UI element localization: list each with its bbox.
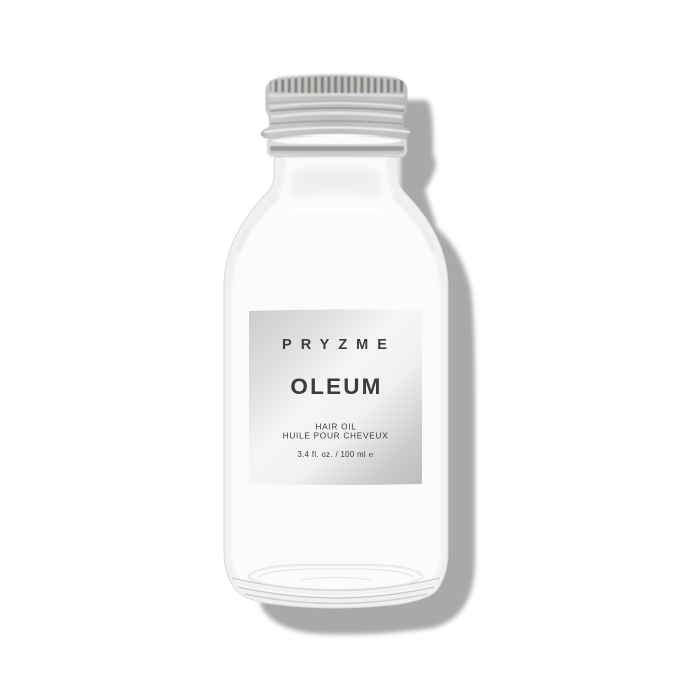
glass shoulder reflections: [238, 166, 434, 252]
volume: 3.4 fl. oz. / 100 ml ℮: [297, 450, 374, 459]
glass bottle: [224, 72, 448, 608]
bottle body outer glass: [224, 155, 448, 608]
neck: [267, 136, 407, 157]
cap rim and thread highlights: [268, 94, 405, 96]
bottle inner volume: [231, 158, 441, 591]
bottle drop shadow: [250, 100, 475, 634]
product type in French: HUILE POUR CHEVEUX: [283, 430, 388, 440]
product illustration: glass bottle with drop shadow: [224, 74, 478, 638]
product type: HAIR OIL: [315, 422, 357, 432]
cap ribbing: [270, 76, 404, 94]
product name: OLEUM: [290, 374, 383, 399]
silver product label: [249, 310, 422, 485]
bottle base rings: [232, 565, 440, 604]
brand name: PRYZME: [282, 337, 396, 353]
metal screw cap: [261, 72, 411, 138]
